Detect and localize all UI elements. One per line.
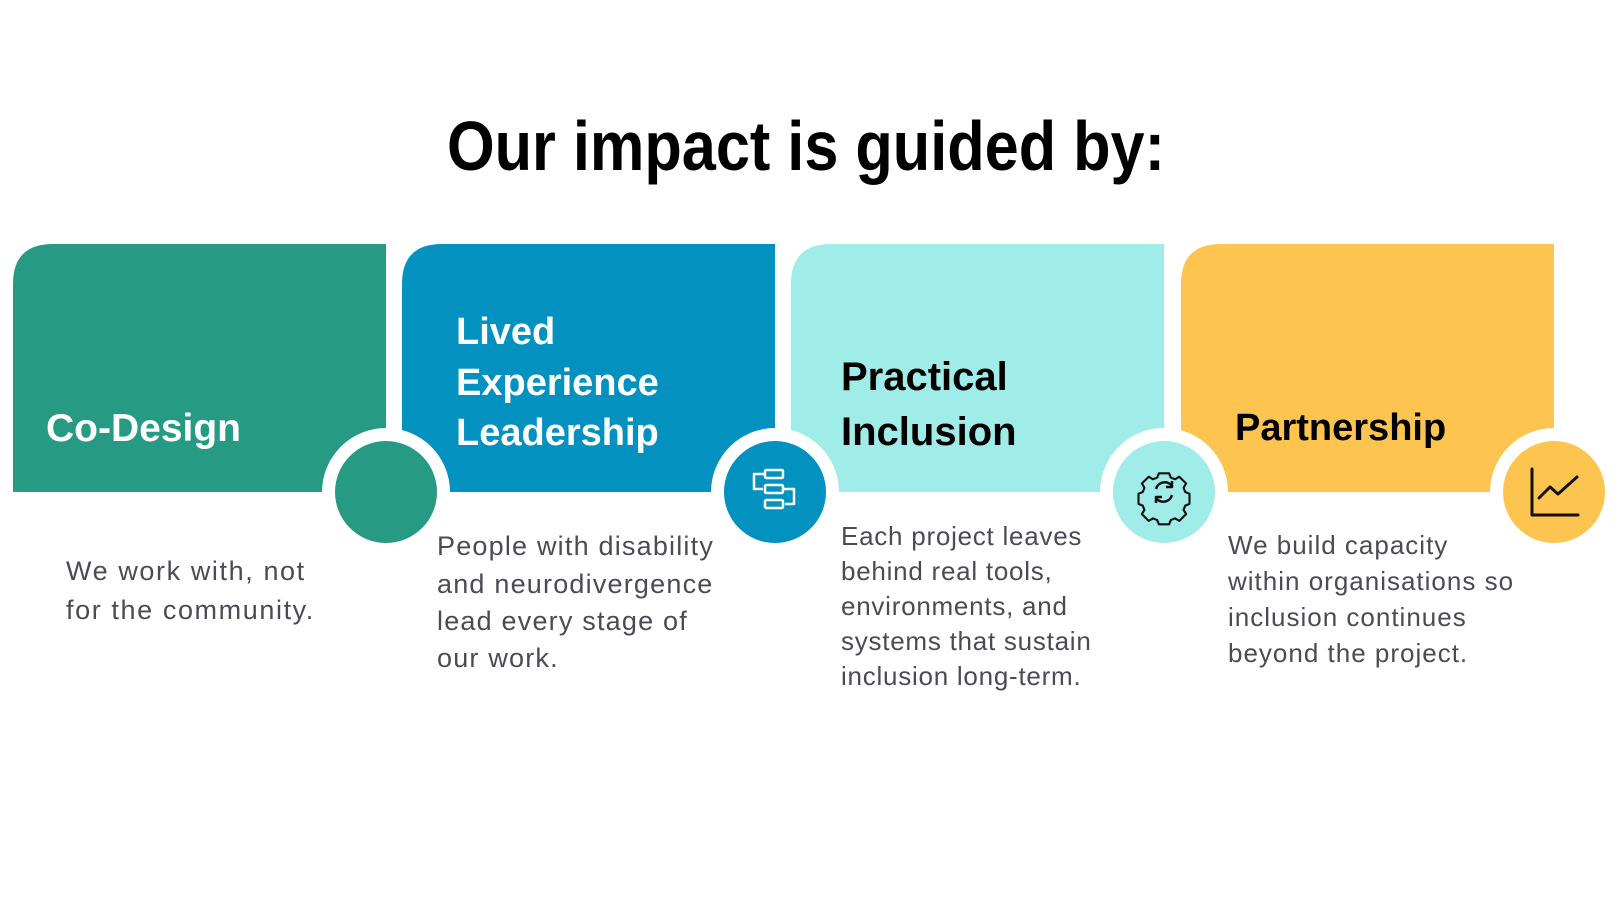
text: partnership description: We build capacity	[1228, 530, 1448, 560]
title: Our impact is guided by:	[447, 107, 1165, 185]
text: partnership description: inclusion continues	[1228, 602, 1467, 632]
text: lived experience description: and neurodivergence	[437, 569, 714, 599]
icon: line chart	[1490, 428, 1618, 556]
text: practical inclusion description: inclusion long-term.	[841, 661, 1081, 691]
text: partnership description: within organisations so	[1227, 566, 1514, 596]
text: lived experience description: lead every stage of	[437, 606, 688, 636]
text: lived experience description: our work.	[437, 643, 559, 673]
icon: green circle	[322, 428, 450, 556]
heading: lived experience leadership: Lived	[456, 311, 555, 353]
heading: co-design: Co-Design	[46, 407, 241, 450]
icon: flowchart	[711, 428, 839, 556]
heading: lived experience leadership: Experience	[456, 362, 659, 404]
icon: gear refresh	[1100, 428, 1228, 556]
heading: partnership: Partnership	[1235, 407, 1446, 449]
text: practical inclusion description: Each project leaves	[841, 521, 1082, 551]
panel: lived experience leadership	[402, 244, 775, 492]
text: practical inclusion description: behind real tools,	[841, 556, 1053, 586]
text: co-design description: for the community.	[66, 595, 315, 625]
heading: lived experience leadership: Leadership	[456, 412, 659, 454]
panel: practical inclusion	[791, 244, 1164, 492]
text: co-design description: We work with, not	[66, 556, 306, 586]
text: partnership description: beyond the project.	[1228, 638, 1468, 668]
heading: practical inclusion: Inclusion	[841, 410, 1017, 454]
text: practical inclusion description: environments, and	[841, 591, 1068, 621]
heading: practical inclusion: Practical	[841, 355, 1008, 399]
text: lived experience description: People with disability	[437, 531, 714, 561]
panel: partnership	[1181, 244, 1554, 492]
text: practical inclusion description: systems that sustain	[841, 626, 1092, 656]
panel: co-design	[13, 244, 386, 492]
